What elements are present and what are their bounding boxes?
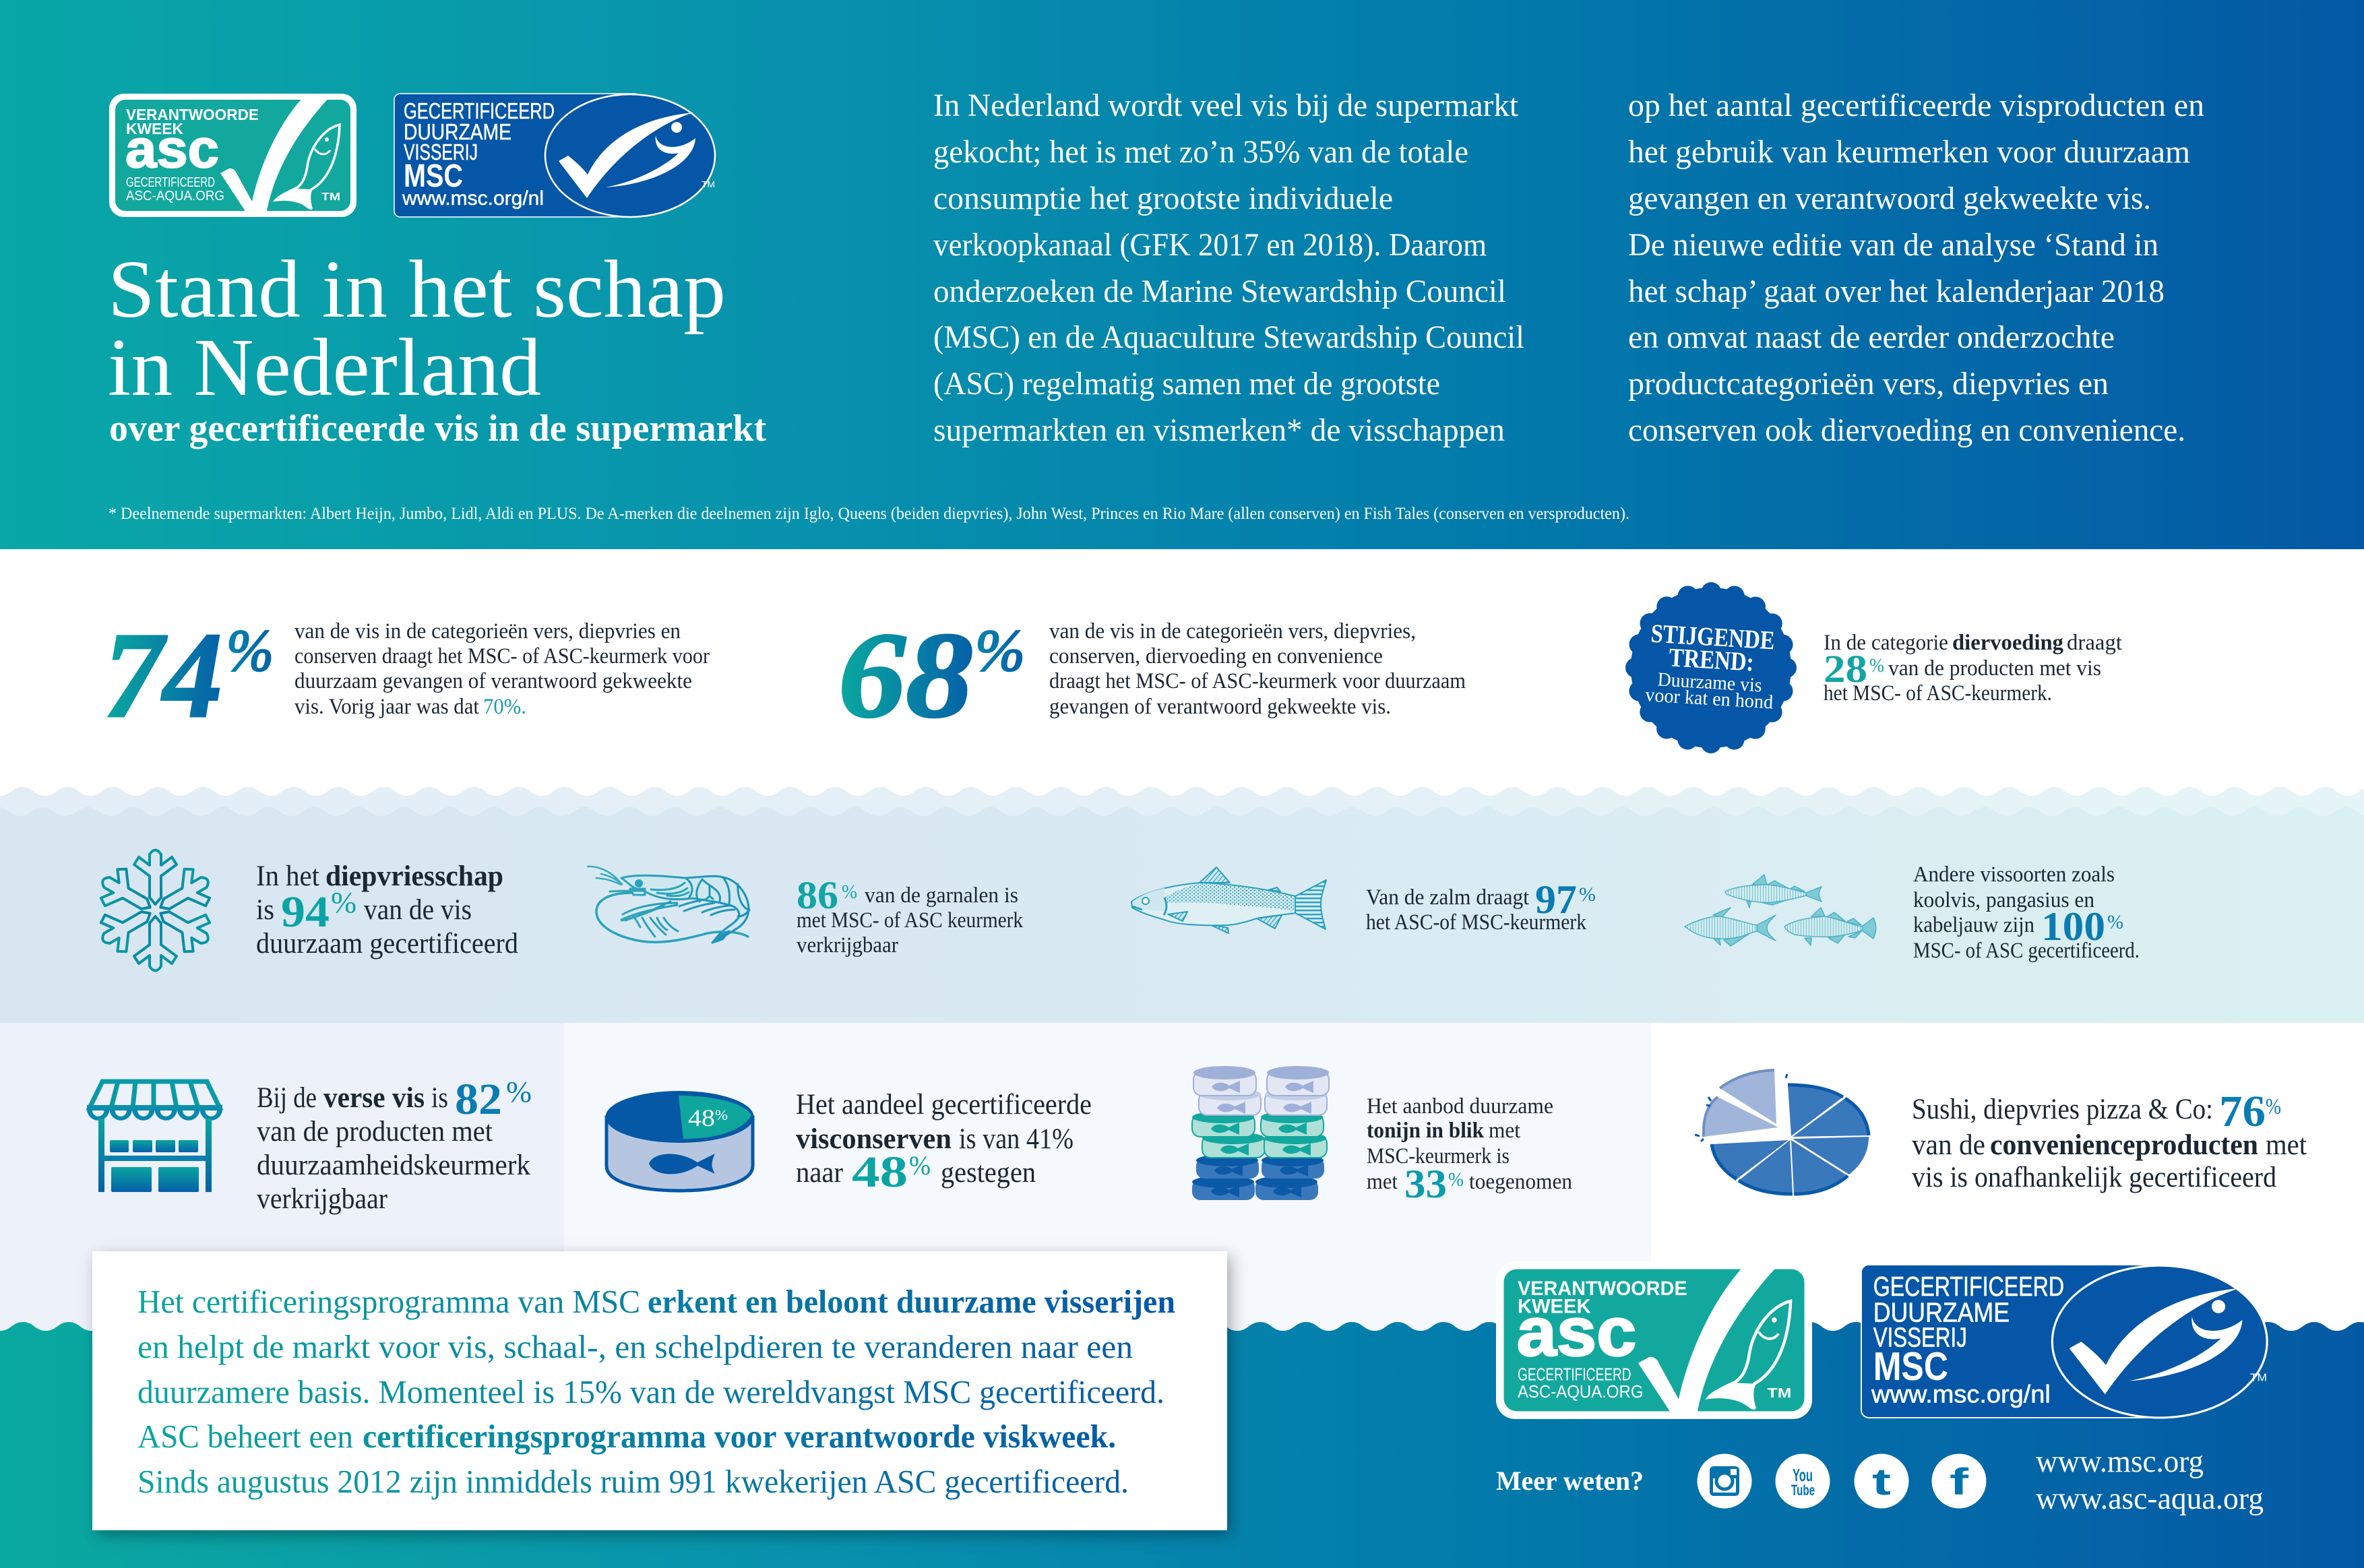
badge: stijgende trend: voor kat en hond	[1644, 684, 1774, 714]
icon: tin can 48 percent	[605, 1091, 753, 1191]
badge: stijgende trend: STIJGENDE	[1650, 619, 1776, 655]
logo: ASC bottom: KWEEK	[1518, 1296, 1591, 1318]
stat: dierenvoeding 28 percent: het MSC- of ASC-keurmerk.	[1824, 681, 2052, 705]
intro text column 2: gevangen en verantwoord gekweekte vis.	[1628, 181, 2151, 216]
stat: garnalen 86 percent: van de garnalen is	[865, 883, 1018, 908]
icon: salmon	[1131, 867, 1326, 933]
text: zalm 97 percent: %	[1579, 883, 1596, 906]
text: website links: www.msc.org	[2036, 1444, 2204, 1479]
stat: tonijn 33 percent: met	[1367, 1170, 1398, 1194]
stat: diepvries 94 percent	[256, 860, 518, 960]
logo: MSC top: GECERTIFICEERD	[404, 98, 555, 123]
intro text column 1: gekocht; het is met zo’n 35% van de totale	[933, 134, 1468, 170]
icon: twitter: t	[1872, 1460, 1891, 1503]
stat: diepvries 94 percent: is	[256, 894, 274, 926]
badge: stijgende trend: Duurzame vis	[1657, 668, 1763, 696]
intro text column 1	[933, 88, 1524, 448]
stat: convenience 76 percent	[1912, 1087, 2307, 1193]
text: andere vissoorten 100 percent: %	[2107, 911, 2123, 933]
stat: 68 percent: draagt het MSC- of ASC-keurmerk voor duurzaam	[1049, 669, 1466, 693]
logo: MSC top: TM	[702, 179, 715, 189]
title: in Nederland	[108, 322, 541, 413]
stat: verse vis 82 percent: is	[431, 1082, 448, 1114]
stat: convenience 76 percent: van de	[1912, 1129, 1985, 1161]
stat: verse vis 82 percent: duurzaamheidskeurmerk	[257, 1150, 530, 1181]
stat: verse vis 82 percent: %	[506, 1075, 532, 1108]
stat: 74 percent	[104, 608, 710, 743]
icon: stacked tuna cans	[1192, 1066, 1329, 1200]
logo: ASC bottom: VERANTWOORDE	[1518, 1278, 1687, 1300]
text: visconserven 48 percent: 48	[852, 1148, 908, 1197]
badge: stijgende trend	[1631, 588, 1791, 748]
logo: ASC bottom: asc	[1517, 1292, 1636, 1370]
stat: diepvries 94 percent: 94	[281, 887, 330, 937]
panel: header background	[0, 0, 2364, 549]
callout: certification programme: duurzamere basis. Momenteel is 15% van de wereldvangst MSC gecertificeerd.	[137, 1373, 1164, 1410]
stat: convenience 76 percent: convenienceproducten	[1990, 1129, 2258, 1161]
stat: verse vis 82 percent: verkrijgbaar	[257, 1183, 387, 1215]
text: zalm 97 percent: 97	[1535, 877, 1577, 922]
logo: MSC bottom: DUURZAME	[1873, 1297, 2010, 1327]
stat: 68 percent: van de vis in de categorieën vers, diepvries,	[1049, 619, 1416, 644]
stat: dierenvoeding 28 percent: 28	[1824, 647, 1867, 691]
panel: bottom background	[0, 1322, 2364, 1568]
stat: dierenvoeding 28 percent	[1824, 631, 2122, 705]
logo: ASC bottom: TM	[1768, 1385, 1791, 1401]
stat: verse vis 82 percent: Bij de	[257, 1082, 317, 1114]
text: visconserven 48 percent: gestegen	[941, 1157, 1036, 1189]
stat: garnalen 86 percent: met MSC- of ASC keurmerk	[797, 908, 1023, 933]
intro text column 2: De nieuwe editie van de analyse ‘Stand in	[1628, 227, 2158, 263]
panel: conserven background	[564, 1023, 1651, 1326]
text: visconserven 48 percent: %	[909, 1150, 931, 1181]
logo: MSC bottom: TM	[2250, 1372, 2267, 1383]
stat: tonijn 33 percent: toegenomen	[1469, 1170, 1572, 1194]
text: andere vissoorten 100 percent: MSC- of ASC gecertificeerd.	[1913, 939, 2140, 963]
intro text column 1: (ASC) regelmatig samen met de grootste	[933, 366, 1440, 402]
callout: certification programme	[92, 1251, 1227, 1530]
stat: convenience 76 percent: vis is onafhankelijk gecertificeerd	[1912, 1162, 2276, 1193]
text: visconserven 48 percent: is van 41%	[959, 1123, 1074, 1155]
text: website links: www.asc-aqua.org	[2036, 1481, 2264, 1516]
stat: 74 percent: vis. Vorig jaar was dat	[294, 695, 479, 719]
intro text column 1: (MSC) en de Aquaculture Stewardship Council	[933, 319, 1524, 355]
text: visconserven 48 percent: Het aandeel gecertificeerde	[796, 1089, 1092, 1121]
title: Stand in het schap	[108, 244, 726, 335]
stat: dierenvoeding 28 percent: draagt	[2067, 631, 2122, 655]
logo: ASC top: TM	[321, 191, 340, 203]
stat: verse vis 82 percent: 82	[455, 1075, 502, 1124]
intro text column 2: op het aantal gecertificeerde visproducten en	[1628, 88, 2204, 123]
stat: 68 percent: %	[975, 619, 1025, 684]
icon: three fish	[1685, 875, 1876, 946]
icon: facebook	[1931, 1454, 1987, 1508]
panel: verse vis background	[0, 1023, 564, 1326]
text: meer weten: Meer weten?	[1496, 1466, 1644, 1496]
text: zalm 97 percent: Van de zalm draagt	[1366, 885, 1529, 910]
stat: diepvries 94 percent: In het	[256, 860, 319, 892]
stat: convenience 76 percent: %	[2266, 1094, 2281, 1119]
logo: MSC bottom	[1861, 1265, 2267, 1418]
logo: MSC top: DUURZAME	[404, 119, 511, 144]
callout: certification programme: Het certificeringsprogramma van MSC	[137, 1283, 640, 1320]
callout: certification programme: certificeringsprogramma voor verantwoorde viskweek.	[363, 1418, 1116, 1455]
stat: convenience 76 percent: 76	[2219, 1087, 2266, 1136]
intro text column 2: conserven ook diervoeding en convenience.	[1628, 412, 2185, 448]
callout: certification programme: erkent en beloont duurzame visserijen	[648, 1283, 1175, 1320]
stat: verse vis 82 percent: van de producten met	[257, 1116, 493, 1148]
stat: tonijn 33 percent: tonijn in blik	[1367, 1119, 1485, 1143]
text: zalm 97 percent	[1366, 877, 1596, 935]
stat: verse vis 82 percent	[257, 1075, 532, 1215]
logo: MSC top	[394, 94, 715, 217]
intro text column 2: productcategorieën vers, diepvries en	[1628, 366, 2109, 402]
panel: category band	[0, 787, 2364, 1023]
text: andere vissoorten 100 percent: kabeljauw zijn	[1913, 913, 2034, 937]
intro text column 1: In Nederland wordt veel vis bij de supermarkt	[933, 88, 1519, 123]
intro text column 2: het schap’ gaat over het kalenderjaar 2018	[1628, 274, 2165, 309]
text: andere vissoorten 100 percent: Andere vissoorten zoals	[1913, 863, 2115, 887]
logo: MSC top: MSC	[404, 158, 463, 194]
stat: dierenvoeding 28 percent: %	[1869, 654, 1884, 677]
stat: diepvries 94 percent: van de vis	[364, 894, 472, 926]
stat: dierenvoeding 28 percent: van de producten met vis	[1888, 656, 2101, 681]
icon: youtube: Tube	[1791, 1482, 1815, 1499]
icon: shrimp	[588, 867, 749, 943]
icon: instagram	[1697, 1454, 1752, 1508]
logo: ASC bottom	[1496, 1261, 1812, 1419]
stat: garnalen 86 percent: verkrijgbaar	[797, 933, 898, 958]
icon: shop	[87, 1081, 222, 1192]
intro text column 2: en omvat naast de eerder onderzochte	[1628, 319, 2115, 355]
logo: MSC top: VISSERIJ	[404, 139, 478, 164]
intro text column 1: supermarkten en vismerken* de visschappen	[933, 412, 1505, 448]
icon: twitter	[1855, 1454, 1908, 1508]
logo: ASC top	[109, 94, 356, 217]
text: andere vissoorten 100 percent: 100	[2041, 904, 2105, 949]
icon: facebook: f	[1950, 1460, 1969, 1503]
text: zalm 97 percent: het ASC-of MSC-keurmerk	[1366, 910, 1586, 935]
stat: convenience 76 percent: Sushi, diepvries pizza & Co:	[1912, 1094, 2213, 1125]
stat: garnalen 86 percent: 86	[797, 873, 838, 917]
stat: 74 percent: %	[226, 619, 274, 684]
stat: dierenvoeding 28 percent: diervoeding	[1952, 631, 2063, 655]
icon: youtube: You	[1793, 1465, 1813, 1485]
icon: snowflake	[92, 850, 218, 970]
icon: tin can 48 percent: 48	[688, 1104, 715, 1131]
stat: garnalen 86 percent	[797, 873, 1023, 958]
stat: diepvries 94 percent: %	[331, 886, 356, 919]
stat: garnalen 86 percent: %	[842, 881, 857, 903]
logo: ASC bottom: ASC-AQUA.ORG	[1518, 1383, 1644, 1402]
intro text column 1: onderzoeken de Marine Stewardship Council	[933, 274, 1506, 309]
text: andere vissoorten 100 percent	[1913, 863, 2140, 963]
stat: 68 percent	[838, 608, 1466, 743]
badge: stijgende trend: TREND:	[1669, 643, 1755, 677]
logo: MSC bottom: VISSERIJ	[1873, 1322, 1967, 1352]
callout: certification programme: ASC beheert een	[137, 1418, 353, 1455]
text: website links	[2036, 1444, 2264, 1516]
footnote: * Deelnemende supermarkten: Albert Heijn, Jumbo, Lidl, Aldi en PLUS. De A-merken die deelnemen zijn Iglo, Queens (beiden diepvries), John West, Princes en Rio Mare (allen conserven) en Fish Tales (conserven en versproducten).	[108, 505, 1629, 523]
stat: 74 percent: 70%.	[483, 695, 526, 719]
callout: certification programme: en helpt de markt voor vis, schaal-, en schelpdieren te veranderen naar een	[137, 1328, 1133, 1365]
logo: MSC top: www.msc.org/nl	[402, 187, 544, 210]
logo: ASC top: KWEEK	[126, 120, 183, 137]
logo: MSC bottom: www.msc.org/nl	[1871, 1380, 2051, 1408]
stat: 68 percent: conserven, diervoeding en convenience	[1049, 644, 1383, 668]
stat: tonijn 33 percent	[1367, 1094, 1572, 1206]
stat: diepvries 94 percent: diepvriesschap	[325, 860, 503, 892]
icon: tin can 48 percent: %	[715, 1106, 728, 1123]
stat: 74 percent: duurzaam gevangen of verantwoord gekweekte	[294, 669, 692, 693]
logo: ASC top: GECERTIFICEERD	[126, 175, 215, 190]
intro text column 1: verkoopkanaal (GFK 2017 en 2018). Daarom	[933, 227, 1487, 263]
text: visconserven 48 percent: visconserven	[796, 1123, 952, 1155]
icon: youtube	[1775, 1454, 1830, 1508]
stat: 68 percent: 68	[838, 608, 973, 743]
stat: convenience 76 percent: met	[2266, 1129, 2307, 1161]
text: visconserven 48 percent	[796, 1089, 1092, 1197]
icon: pie chart	[1695, 1070, 1869, 1194]
logo: MSC bottom: MSC	[1873, 1344, 1948, 1389]
title	[108, 244, 726, 413]
text: visconserven 48 percent: naar	[796, 1157, 843, 1189]
logo: ASC top: asc	[125, 119, 219, 179]
stat: tonijn 33 percent: %	[1448, 1168, 1464, 1191]
logo: ASC bottom: GECERTIFICEERD	[1518, 1365, 1631, 1384]
logo: MSC bottom: GECERTIFICEERD	[1873, 1271, 2064, 1302]
stat: tonijn 33 percent: met	[1489, 1119, 1520, 1143]
callout: certification programme: Sinds augustus 2012 zijn inmiddels ruim 991 kwekerijen ASC gecertificeerd.	[137, 1463, 1129, 1500]
stat: 68 percent: gevangen of verantwoord gekweekte vis.	[1049, 695, 1391, 719]
stat: tonijn 33 percent: Het aanbod duurzame	[1367, 1094, 1553, 1119]
stat: dierenvoeding 28 percent: In de categorie	[1824, 631, 1948, 655]
stat: diepvries 94 percent: duurzaam gecertificeerd	[256, 928, 518, 960]
stat: tonijn 33 percent: MSC-keurmerk is	[1367, 1144, 1510, 1168]
intro text column 2: het gebruik van keurmerken voor duurzaam	[1628, 134, 2190, 170]
text: andere vissoorten 100 percent: koolvis, pangasius en	[1913, 888, 2094, 912]
stat: 74 percent: conserven draagt het MSC- of ASC-keurmerk voor	[294, 644, 710, 668]
intro text column 1: consumptie het grootste individuele	[933, 181, 1393, 216]
stat: tonijn 33 percent: 33	[1404, 1162, 1447, 1206]
intro text column 2	[1628, 88, 2204, 448]
logo: ASC top: ASC-AQUA.ORG	[126, 189, 224, 203]
stat: verse vis 82 percent: verse vis	[323, 1082, 425, 1114]
stat: 74 percent: van de vis in de categorieën vers, diepvries en	[294, 619, 681, 644]
subtitle: over gecertificeerde vis in de supermarkt	[109, 408, 766, 449]
stat: 74 percent: 74	[104, 608, 222, 743]
logo: ASC top: VERANTWOORDE	[126, 106, 259, 123]
